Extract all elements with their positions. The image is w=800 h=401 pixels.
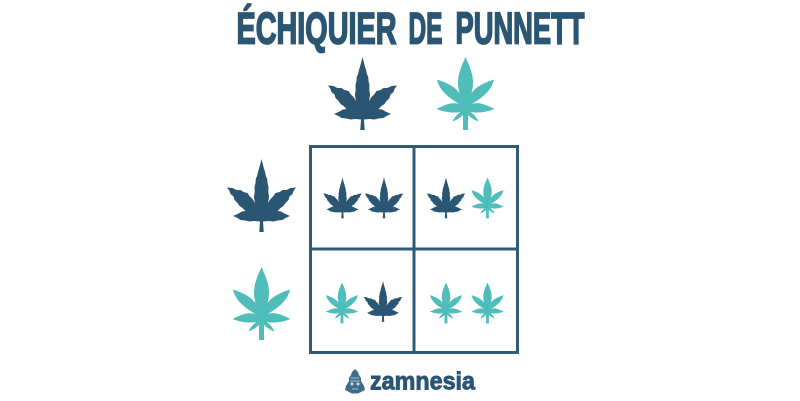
- punnett square grid: [310, 146, 518, 353]
- cell: bottom left, teal and dark leaves: [326, 281, 402, 323]
- icon: top teal parent leaf: [436, 57, 494, 130]
- title: ÉCHIQUIER: [236, 4, 396, 54]
- icon: left teal parent leaf: [232, 267, 290, 340]
- cell: top right, dark and teal leaves: [427, 178, 504, 218]
- icon: logo emblem: [345, 369, 365, 394]
- title: PUNNETT: [456, 4, 584, 54]
- icon: top dark parent leaf: [328, 57, 397, 130]
- logo wordmark: zamnesia: [370, 368, 476, 396]
- logo: zamnesia: [345, 368, 476, 396]
- title: [236, 4, 584, 54]
- title: DE: [408, 4, 442, 54]
- icon: left dark parent leaf: [227, 159, 296, 232]
- cell: top left, two dark leaves: [323, 178, 403, 218]
- cell: bottom right, two teal leaves: [430, 282, 504, 323]
